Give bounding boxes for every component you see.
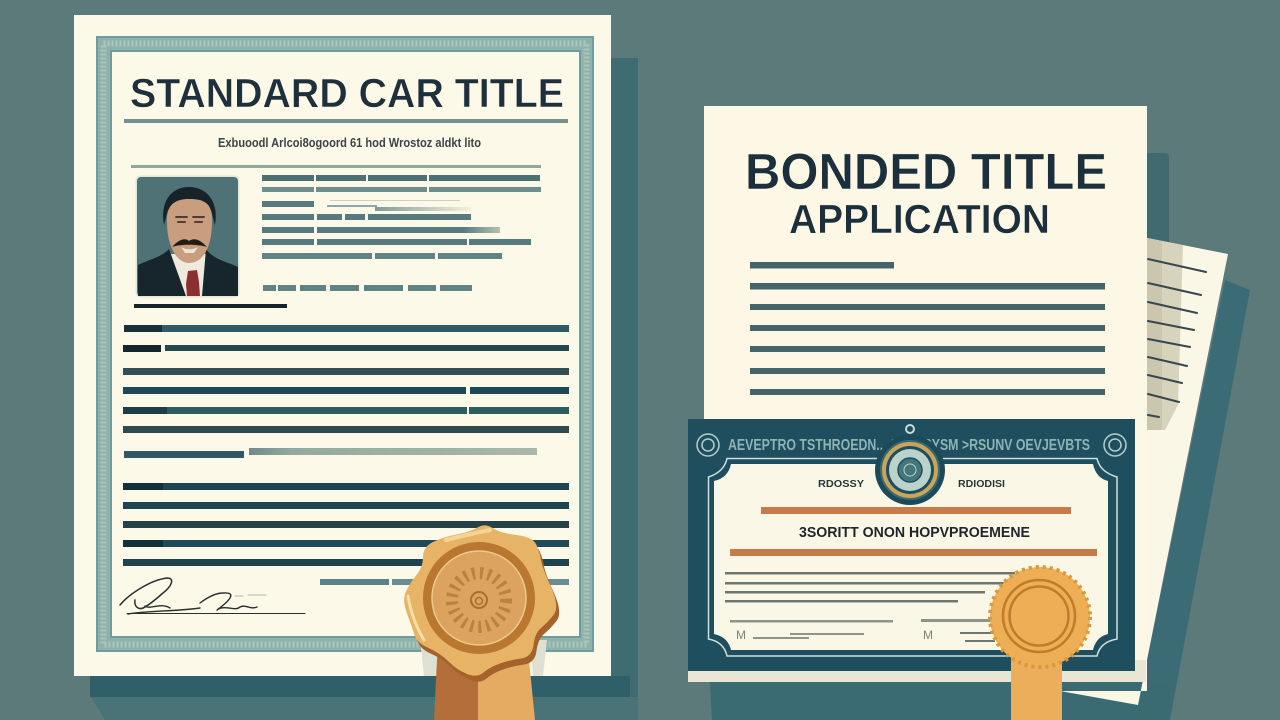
body text rows, lower block — [123, 483, 569, 585]
panel: surety bond certificate: M — [923, 628, 933, 642]
shadows behind bonded title application — [710, 153, 1250, 720]
panel: bonded title application page — [704, 106, 1147, 682]
back page text lines — [1148, 259, 1206, 417]
orange rule bottom — [730, 549, 1097, 556]
portrait photo — [136, 176, 240, 298]
icon: wax seal — [404, 525, 559, 682]
certificate text lines — [725, 572, 1015, 642]
panel: standard car title shadow — [90, 58, 638, 720]
certificate border — [97, 37, 593, 651]
icon: gold seal — [990, 567, 1090, 667]
subtitle text: Exbuoodl Arlcoi8ogoord 61 hod Wrostoz aldkt lito — [218, 135, 481, 150]
record data rows — [262, 175, 541, 291]
orange rule top — [761, 507, 1071, 514]
certificate heading: 3SORITT ONON HOPVPROEMENE — [799, 525, 1030, 541]
panel: paper under bond certificate — [688, 660, 1146, 682]
medallion — [875, 425, 945, 505]
body text rows, upper block — [123, 325, 569, 458]
heading: standard car title: STANDARD CAR TITLE — [130, 70, 564, 116]
heading: bonded title: BONDED TITLE — [745, 143, 1107, 200]
certificate inner frame — [708, 458, 1117, 656]
certificate ornamental text: AEVEPTRO TSTHROEDN... SAVRSYSM >RSUNV OEVJEVBTS — [728, 437, 1090, 454]
panel: surety bond certificate: RDIODISI — [958, 478, 1005, 490]
panel: surety bond certificate — [688, 419, 1135, 671]
signature — [120, 578, 305, 614]
panel: standard car title document — [74, 15, 611, 676]
icon: gold seal ribbon — [1011, 655, 1062, 720]
signature marks: M — [736, 628, 746, 642]
icon: wax seal ribbon — [434, 640, 535, 720]
heading: application: APPLICATION — [789, 196, 1050, 242]
ornament: corner rosettes — [697, 434, 1126, 456]
wax seal soft shadow — [420, 640, 547, 676]
panel: back page of application — [1060, 238, 1228, 705]
application text lines — [750, 262, 1105, 395]
small labels: RDOSSY — [818, 478, 864, 490]
